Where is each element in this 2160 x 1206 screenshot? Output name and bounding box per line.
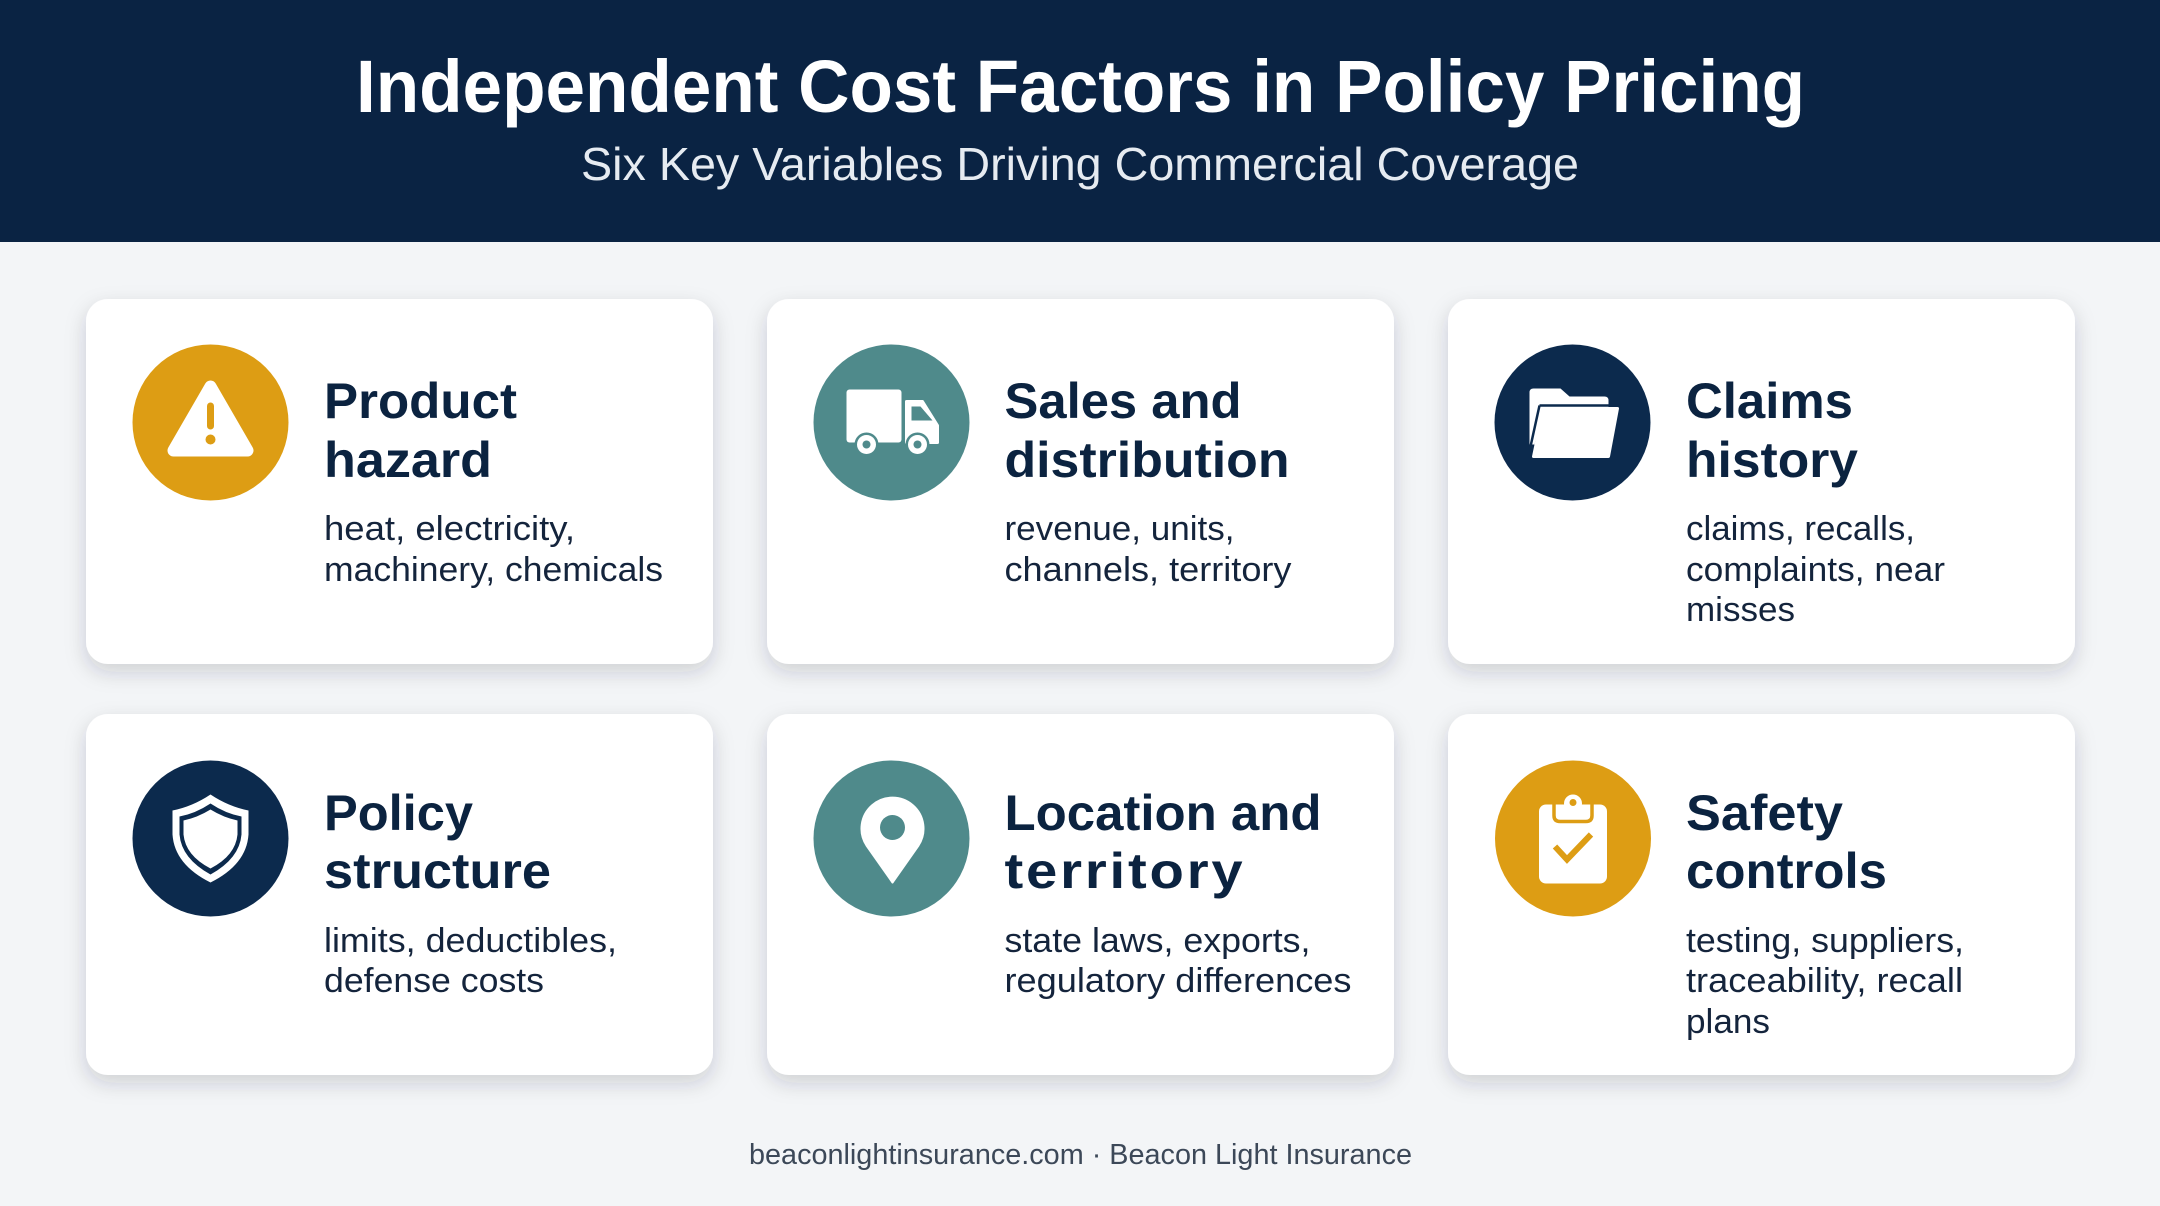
description: channels, territory: [1004, 551, 1292, 589]
icon: map pin: [814, 760, 970, 916]
icon: clipboard check: [1495, 760, 1651, 916]
heading: Location and: [1004, 785, 1322, 841]
panel: safety controls: [1448, 714, 2075, 1075]
header banner: [0, 0, 2160, 242]
heading: Policy: [324, 785, 473, 841]
heading: history: [1686, 432, 1858, 488]
subtitle: Six Key Variables Driving Commercial Coverage: [581, 138, 1579, 190]
heading: hazard: [324, 432, 492, 488]
icon: shield: [132, 760, 288, 916]
description: machinery, chemicals: [324, 551, 663, 589]
description: state laws, exports,: [1004, 922, 1310, 960]
description: limits, deductibles,: [324, 922, 617, 960]
icon: open folder: [1494, 344, 1650, 500]
panel: claims history: [1448, 299, 2075, 664]
panel: sales and distribution: [767, 299, 1394, 664]
heading: distribution: [1004, 432, 1290, 488]
heading: Safety: [1686, 785, 1843, 841]
description: revenue, units,: [1004, 510, 1234, 548]
icon: delivery truck: [814, 344, 970, 500]
description: plans: [1686, 1003, 1770, 1041]
description: claims, recalls,: [1686, 510, 1915, 548]
heading: controls: [1686, 843, 1887, 899]
footer: beaconlightinsurance.com · Beacon Light Insurance: [749, 1139, 1412, 1171]
heading: Claims: [1686, 373, 1853, 429]
panel: policy structure: [86, 714, 713, 1075]
title: Independent Cost Factors in Policy Pricing: [356, 45, 1805, 128]
heading: Sales and: [1004, 373, 1242, 429]
description: heat, electricity,: [324, 510, 575, 548]
description: regulatory differences: [1004, 962, 1352, 1000]
heading: territory: [1004, 843, 1246, 899]
heading: Product: [324, 373, 517, 429]
heading: structure: [324, 843, 551, 899]
panel: product hazard: [86, 299, 713, 664]
description: complaints, near: [1686, 551, 1945, 589]
description: testing, suppliers,: [1686, 922, 1964, 960]
description: misses: [1686, 591, 1795, 629]
description: traceability, recall: [1686, 962, 1963, 1000]
icon: warning triangle: [132, 344, 288, 500]
panel: location and territory: [767, 714, 1394, 1075]
description: defense costs: [324, 962, 544, 1000]
